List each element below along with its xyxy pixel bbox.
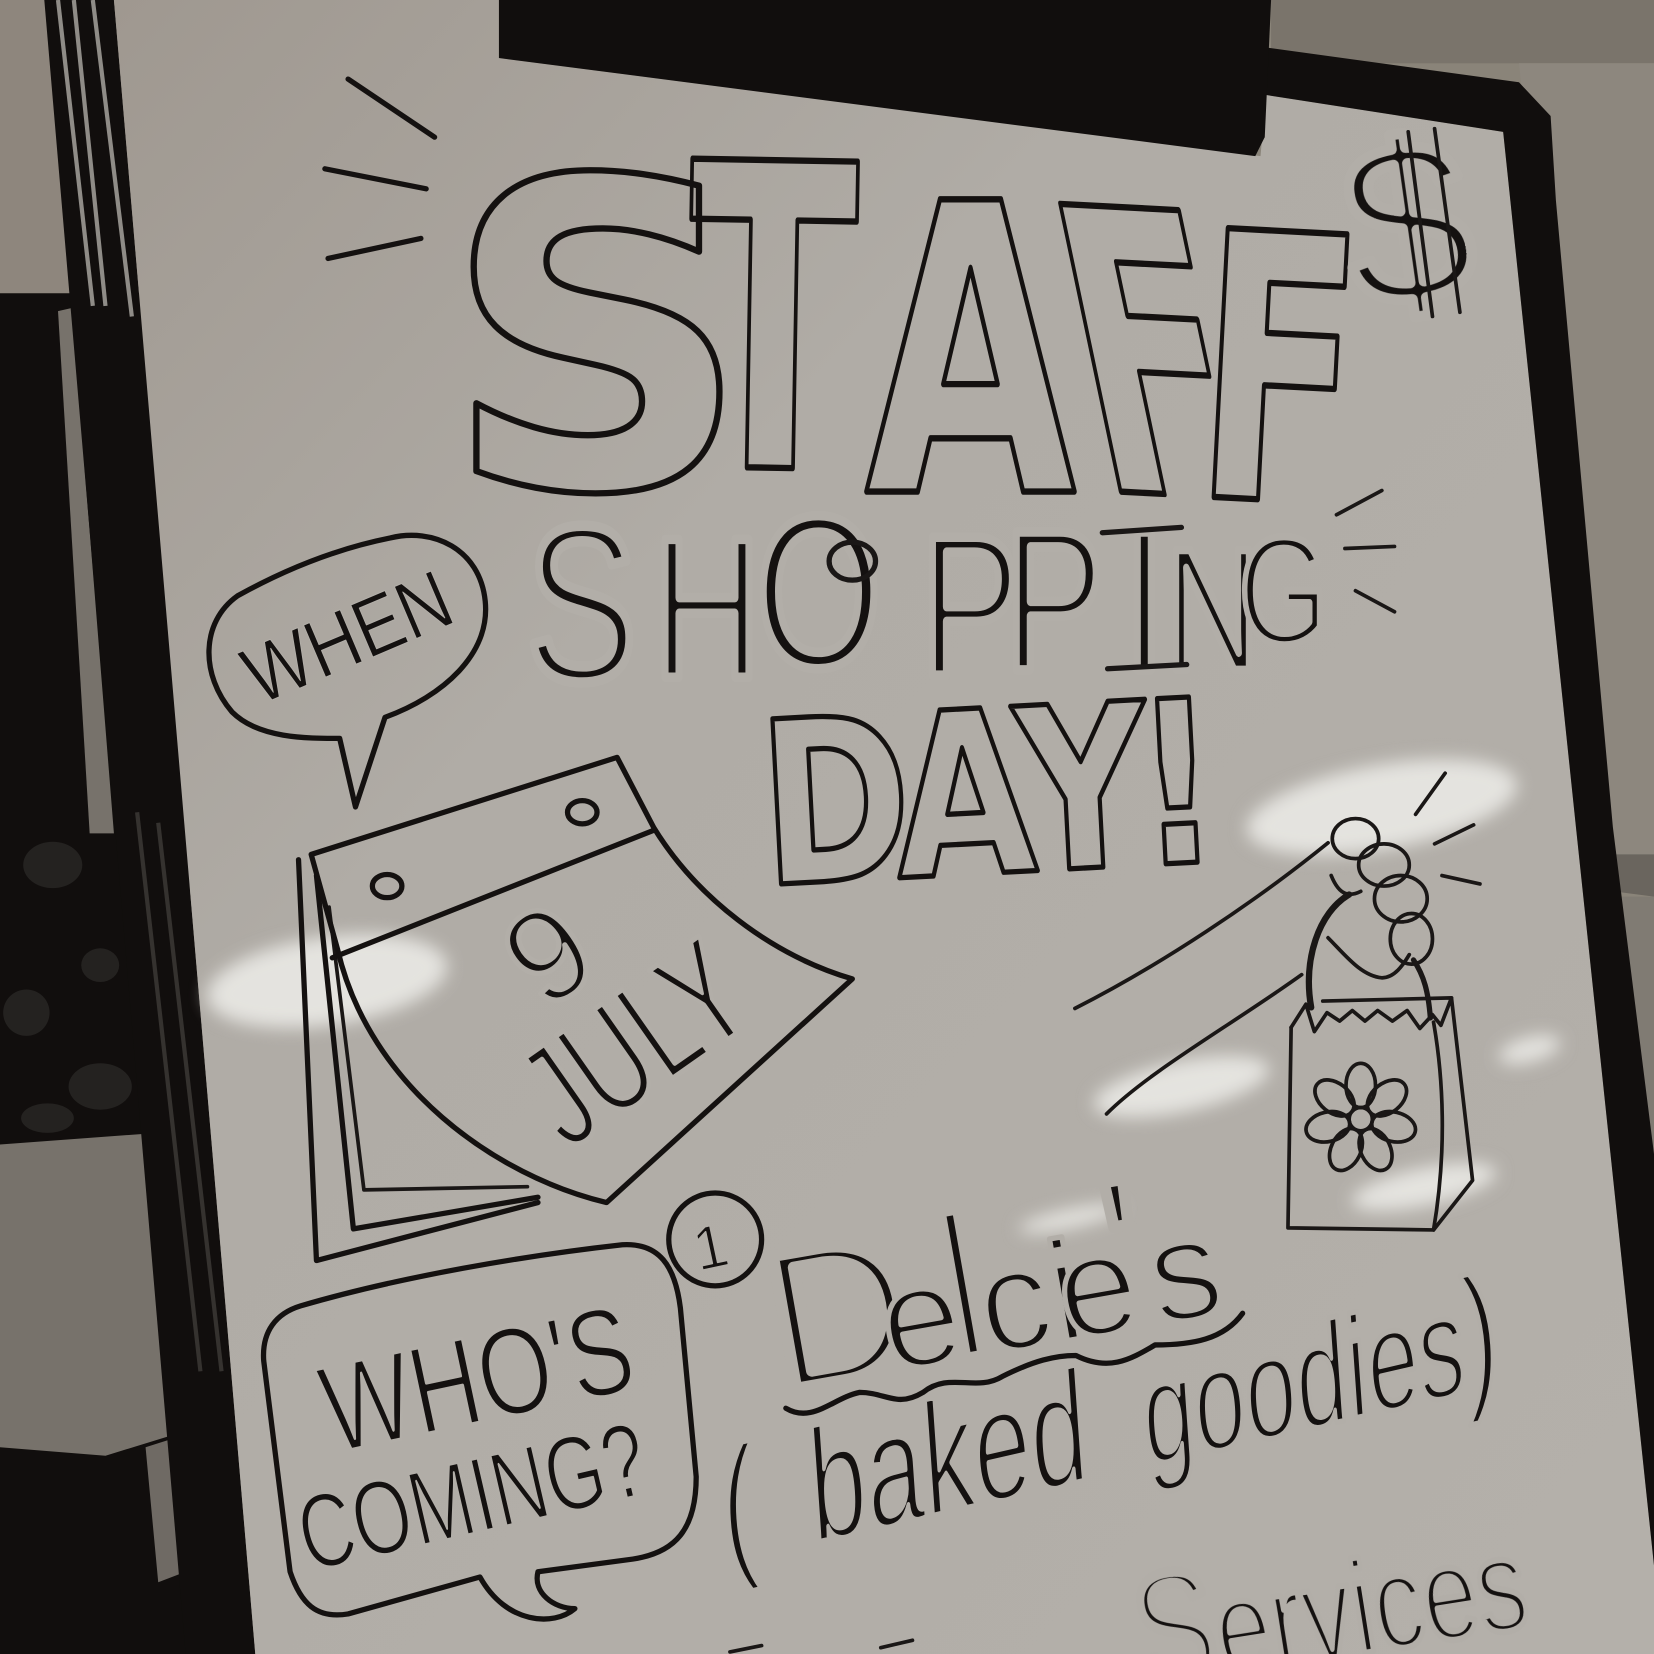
dollar sign: $ <box>1328 90 1488 358</box>
subtitle: SHOPPING: P <box>1004 489 1104 713</box>
partial strokes at bottom edge <box>730 1640 912 1652</box>
rays near SHOPPING <box>1336 491 1395 612</box>
shopping hand <box>1075 819 1432 1114</box>
plant pot <box>0 1134 174 1456</box>
title: STAFF: F <box>1022 124 1279 592</box>
vendor name: Delcie's: D <box>750 1193 927 1433</box>
vendor name: Delcie's: l <box>920 1170 1005 1404</box>
number badge 1 <box>669 1193 762 1286</box>
subtitle: SHOPPING: G <box>1239 505 1328 676</box>
shopping bag <box>1288 895 1473 1230</box>
label: WHO'S: WHO'S <box>309 1279 645 1480</box>
title: STAFF: T <box>684 74 862 569</box>
subtitle: SHOPPING: P <box>920 494 1020 718</box>
rays near hand <box>1416 773 1480 884</box>
black header panel <box>499 0 1271 156</box>
subtitle: SHOPPING: H <box>653 496 761 720</box>
vendor name: Delcie's: ' <box>1085 1132 1166 1372</box>
left board frame <box>44 0 255 1654</box>
floor strip <box>146 1440 186 1582</box>
date: 9: 9 <box>476 873 620 1036</box>
subtitle: DAY!: DAY! <box>753 651 1226 939</box>
plant <box>3 842 132 1133</box>
title: STAFF: F <box>1187 154 1371 592</box>
title: STAFF <box>443 74 1371 592</box>
vendor name: Delcie's: e <box>1044 1201 1150 1371</box>
glare highlights <box>201 742 1563 1239</box>
flower on bag <box>1303 1063 1419 1176</box>
subtitle: SHOPPING: I <box>1123 489 1165 713</box>
month: JULY: JULY <box>491 909 778 1178</box>
top and right board frame <box>1266 47 1654 1565</box>
vendor name: Delcie's: i <box>1036 1211 1095 1373</box>
number badge 1: 1 <box>687 1210 734 1284</box>
speech bubble: who's coming <box>264 1245 696 1619</box>
title: STAFF: A <box>865 120 1078 586</box>
vendor name: Delcie's: e <box>868 1232 973 1403</box>
subtitle: SHOPPING: S <box>526 481 637 728</box>
vendor name: Delcie's: s <box>1136 1186 1233 1355</box>
label: COMING?: COMING? <box>287 1401 658 1594</box>
wavy underline <box>786 1313 1243 1413</box>
subtitle: SHOPPING <box>526 471 1328 728</box>
subtitle: SHOPPING: O <box>756 471 882 713</box>
calendar <box>299 757 852 1261</box>
subtitle: SHOPPING: N <box>1165 513 1260 707</box>
rays near title <box>325 79 435 258</box>
vendor name: Delcie's <box>747 1120 1243 1435</box>
speech bubble: when <box>209 535 486 807</box>
vendor name: Delcie's: c <box>965 1216 1063 1385</box>
label: WHEN: WHEN <box>230 554 465 722</box>
description: baked goodies: ( baked goodies) <box>716 1240 1503 1598</box>
binding holes <box>372 801 597 898</box>
title: STAFF: S <box>443 90 751 588</box>
